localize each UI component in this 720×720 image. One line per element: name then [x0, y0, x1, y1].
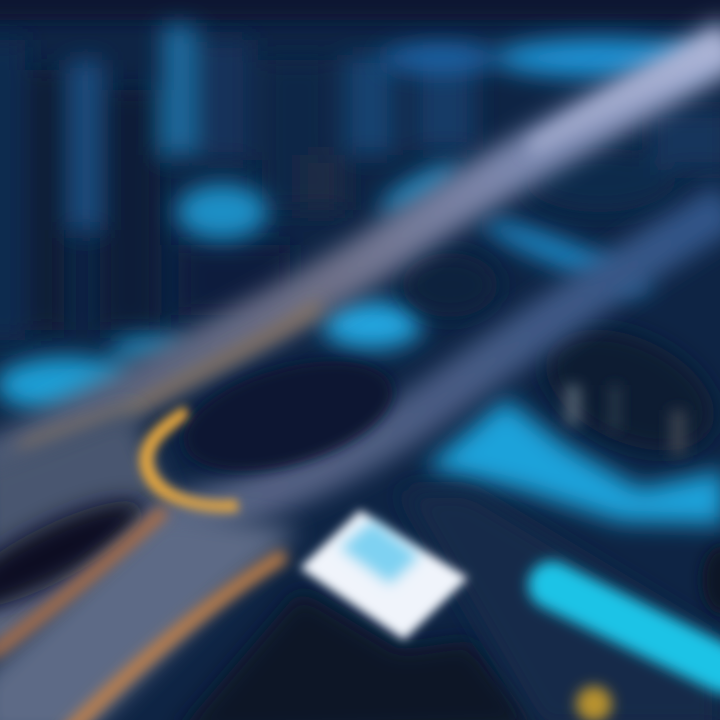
main road — [0, 42, 720, 470]
dark oval — [171, 340, 405, 492]
dark spot right edge — [702, 546, 720, 614]
dark oval centre with orange ring — [146, 340, 405, 507]
yellow marker — [576, 686, 612, 720]
dark void lower left — [0, 482, 156, 628]
card cyan centre — [340, 520, 420, 584]
city: vertical towers upper left — [0, 25, 475, 340]
orange ring — [146, 412, 238, 507]
top dark band — [0, 0, 720, 20]
dark road right of card — [400, 490, 720, 720]
card body — [300, 510, 468, 640]
dark base bottom — [180, 590, 540, 720]
city detail streaks right — [565, 385, 686, 455]
orange lane lines — [0, 510, 285, 720]
bright cyan floor lower right — [425, 398, 720, 525]
main road lower orange edge — [20, 305, 320, 450]
lower road fan — [0, 510, 300, 720]
left road mass — [0, 410, 170, 580]
white card — [300, 510, 468, 640]
cyan bar — [552, 585, 720, 670]
second road — [0, 205, 720, 640]
road edge highlight — [530, 42, 720, 148]
dark block district right — [402, 110, 720, 475]
cyan glow patches — [0, 38, 705, 413]
